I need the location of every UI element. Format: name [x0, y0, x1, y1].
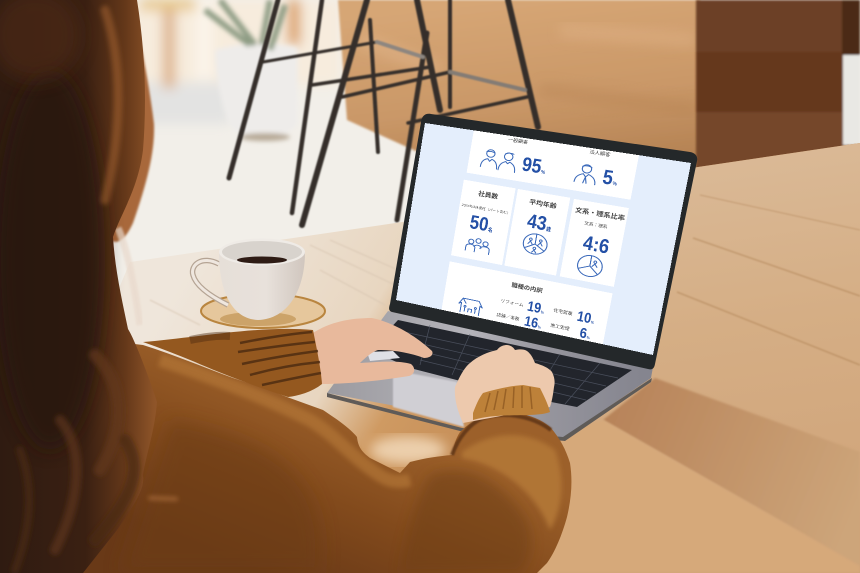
- number: 19 percent: 19%: [526, 298, 544, 316]
- note: humanities science: 文系：理系: [584, 221, 608, 229]
- laptop: [327, 114, 697, 441]
- plant and white pot: [205, 0, 298, 141]
- sweater highlight along shoulder: [160, 360, 410, 482]
- icon: age pie: [522, 233, 548, 255]
- panel: customers: [467, 130, 639, 200]
- face sliver and strands: [100, 0, 154, 242]
- label: sales: 住宅営業: [553, 308, 573, 316]
- sweater body and arm: [40, 340, 571, 573]
- dark hair shading: [0, 70, 105, 450]
- laptop screen content: [396, 123, 691, 355]
- sweater elbow shadow: [400, 470, 531, 573]
- coffee cup and saucer: [193, 238, 325, 328]
- heading: job breakdown: 職種の内訳: [511, 282, 543, 294]
- wood wall: [338, 0, 700, 235]
- laptop lid: [389, 114, 697, 369]
- lower body shadow: [120, 420, 321, 573]
- number: 16 percent: 16%: [523, 313, 541, 331]
- label: corporate customers: 法人顧客: [589, 149, 611, 158]
- label: construction management: 施工管理: [550, 323, 570, 331]
- heading: ratio: 文系・理系比率: [575, 206, 626, 222]
- panel: humanities science ratio: [560, 199, 629, 287]
- trackpad: [393, 370, 464, 427]
- label: reform: リフォーム: [500, 298, 524, 308]
- note: date: 2024年3月現在（パート含む）: [461, 203, 511, 215]
- number: 5 percent: 5%: [601, 165, 617, 189]
- panel: job breakdown: [442, 261, 613, 344]
- heading: employees: 社員数: [478, 190, 499, 200]
- key gaps: [395, 325, 618, 404]
- right sleeve cuff: [473, 385, 550, 420]
- sleeve fold: [452, 415, 551, 455]
- stool legs: [229, 0, 538, 225]
- icon: ratio pie: [577, 254, 603, 277]
- icon: business person: [574, 164, 596, 186]
- label: store office: 店舗／事務: [496, 312, 520, 322]
- number: 10 percent: 10%: [576, 308, 594, 326]
- sweater lit forearm: [462, 435, 561, 530]
- number: 6 percent: 6%: [578, 324, 590, 341]
- left cuff ribs: [190, 332, 321, 385]
- label: general customers: 一般顧客: [508, 137, 528, 145]
- left sleeve cuff: [143, 329, 322, 397]
- wooden table: [0, 143, 860, 573]
- icon: two people: [480, 149, 516, 173]
- reflection near hand: [367, 351, 400, 361]
- number: 43 years: 43歳: [526, 209, 551, 235]
- number: 50 people: 50名: [468, 211, 493, 235]
- icon: three people: [464, 238, 490, 255]
- right hand: [455, 345, 555, 423]
- number: 4 to 6: 4:6: [581, 231, 611, 258]
- left hand: [313, 318, 433, 384]
- heading: average age: 平均年齢: [529, 198, 557, 210]
- number: 95 percent: 95%: [520, 152, 546, 178]
- dark wood block and white pillar: [696, 0, 860, 175]
- icon: house: [458, 298, 483, 316]
- laptop keyboard deck: [327, 311, 653, 438]
- panel: average age: [504, 189, 570, 276]
- laptop front edge: [327, 378, 652, 441]
- hair: [0, 0, 176, 573]
- panel: employees: [451, 180, 516, 265]
- keyboard: [370, 320, 632, 407]
